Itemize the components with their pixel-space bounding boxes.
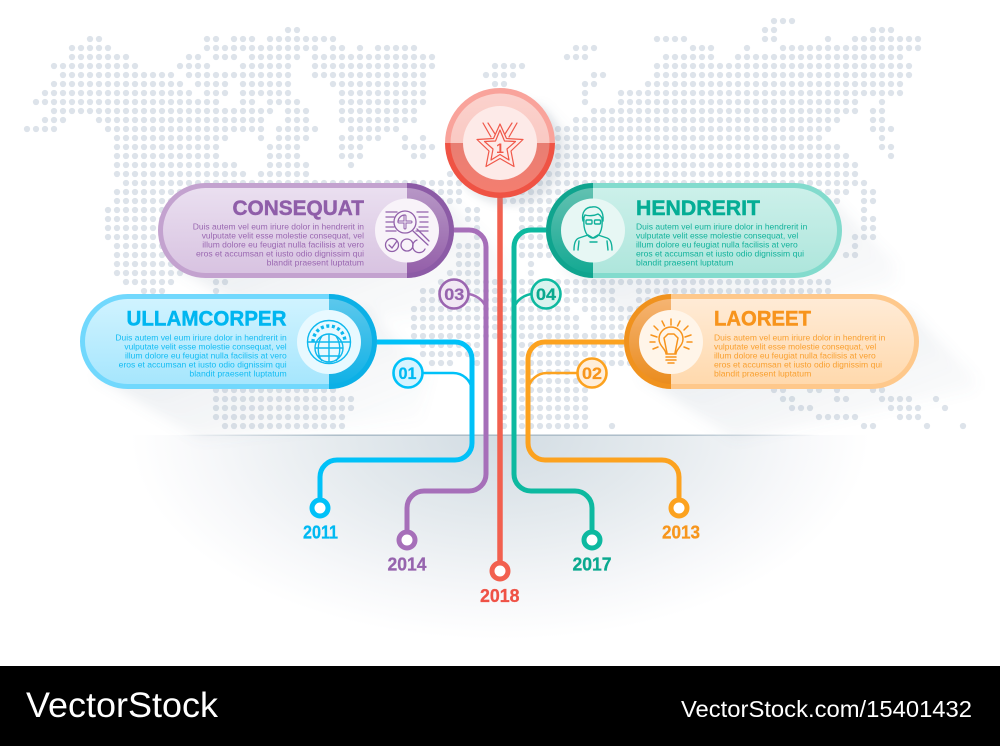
marker 2013: 2013	[662, 522, 700, 542]
panel: consequat	[158, 183, 454, 278]
footer brand: VectorStock	[26, 686, 219, 725]
icon: central star badge: 1	[496, 140, 504, 156]
body text: blandit praesent luptatum	[636, 258, 733, 268]
marker 2014	[388, 532, 427, 574]
dotted world map	[27, 21, 963, 426]
line: 2013 orange	[528, 342, 679, 508]
marker 2017: 2017	[572, 554, 612, 574]
body text: blandit praesent luptatum	[714, 368, 811, 378]
badge 02: 02	[582, 365, 602, 383]
badge 01: 01	[398, 365, 416, 383]
body text	[193, 222, 364, 268]
number badges	[394, 280, 606, 388]
floor shadow	[130, 435, 870, 666]
body text: eros et accumsan et iusto odio dignissim qui	[714, 360, 882, 370]
panel: hendrerit	[546, 183, 842, 278]
line: 2011 blue	[320, 342, 472, 508]
body text: illum dolore eu feugiat nulla facilisis at vero	[202, 240, 364, 250]
body text: illum dolore eu feugiat nulla facilisis at vero	[714, 350, 876, 360]
heading: HENDRERIT	[636, 197, 760, 220]
heading: CONSEQUAT	[232, 197, 364, 220]
marker 2014: 2014	[388, 554, 427, 574]
line: 2018 red	[497, 195, 503, 571]
body text: vulputate velit esse molestie consequat, vel	[202, 230, 364, 240]
badge 04	[532, 280, 560, 308]
floor line	[180, 434, 820, 436]
long shadows	[95, 105, 975, 440]
body text: Duis autem vel eum iriure dolor in hendrerit in	[193, 222, 364, 232]
panel: ullamcorper	[80, 294, 377, 389]
icon: person with glasses	[574, 207, 612, 250]
panel: laoreet	[624, 294, 919, 389]
body text: illum dolore eu feugiat nulla facilisis at vero	[125, 350, 287, 360]
heading: LAOREET	[714, 308, 811, 331]
marker 2018: 2018	[480, 585, 520, 606]
end markers and years	[303, 500, 700, 606]
icon: globe and gear	[308, 320, 350, 364]
body text: vulputate velit esse molestie consequat, vel	[124, 342, 287, 352]
line: 2017 teal	[514, 230, 592, 540]
icon: light bulb	[650, 319, 692, 363]
badge 02	[578, 358, 606, 388]
body text	[714, 332, 886, 378]
body text: vulputate velit esse molestie consequat, vel	[636, 230, 798, 240]
line: 2014 purple	[407, 230, 486, 540]
body text: Duis autem vel eum iriure dolor in hendrerit in	[714, 332, 886, 342]
body text: eros et accumsan et iusto odio dignissim qui	[196, 248, 364, 258]
body text: illum dolore eu feugiat nulla facilisis at vero	[636, 240, 798, 250]
badge 03: 03	[444, 286, 464, 304]
marker 2013	[662, 500, 700, 542]
body text: eros et accumsan et iusto odio dignissim qui	[636, 248, 804, 258]
body text: eros et accumsan et iusto odio dignissim qui	[119, 360, 287, 370]
body text: Duis autem vel eum iriure dolor in hendrerit in	[115, 332, 287, 342]
body text: blandit praesent luptatum	[189, 368, 287, 378]
marker 2011	[303, 500, 338, 542]
badge 03	[440, 280, 468, 308]
badge 01	[394, 358, 422, 388]
marker 2018	[480, 563, 520, 606]
marker 2011: 2011	[303, 522, 338, 542]
connector lines	[320, 195, 679, 571]
body text	[636, 222, 808, 268]
body text: Duis autem vel eum iriure dolor in hendrerit in	[636, 222, 808, 232]
body text: vulputate velit esse molestie consequat, vel	[714, 342, 876, 352]
heading: ULLAMCORPER	[126, 308, 286, 331]
icon: central star badge	[445, 88, 563, 206]
marker 2017	[572, 532, 612, 574]
body text	[115, 332, 287, 378]
footer bar	[0, 666, 1000, 746]
body text: blandit praesent luptatum	[267, 258, 364, 268]
badge 04: 04	[536, 286, 557, 304]
icon: magnifier and checks	[386, 211, 429, 253]
footer image id: VectorStock.com/15401432	[681, 696, 972, 722]
